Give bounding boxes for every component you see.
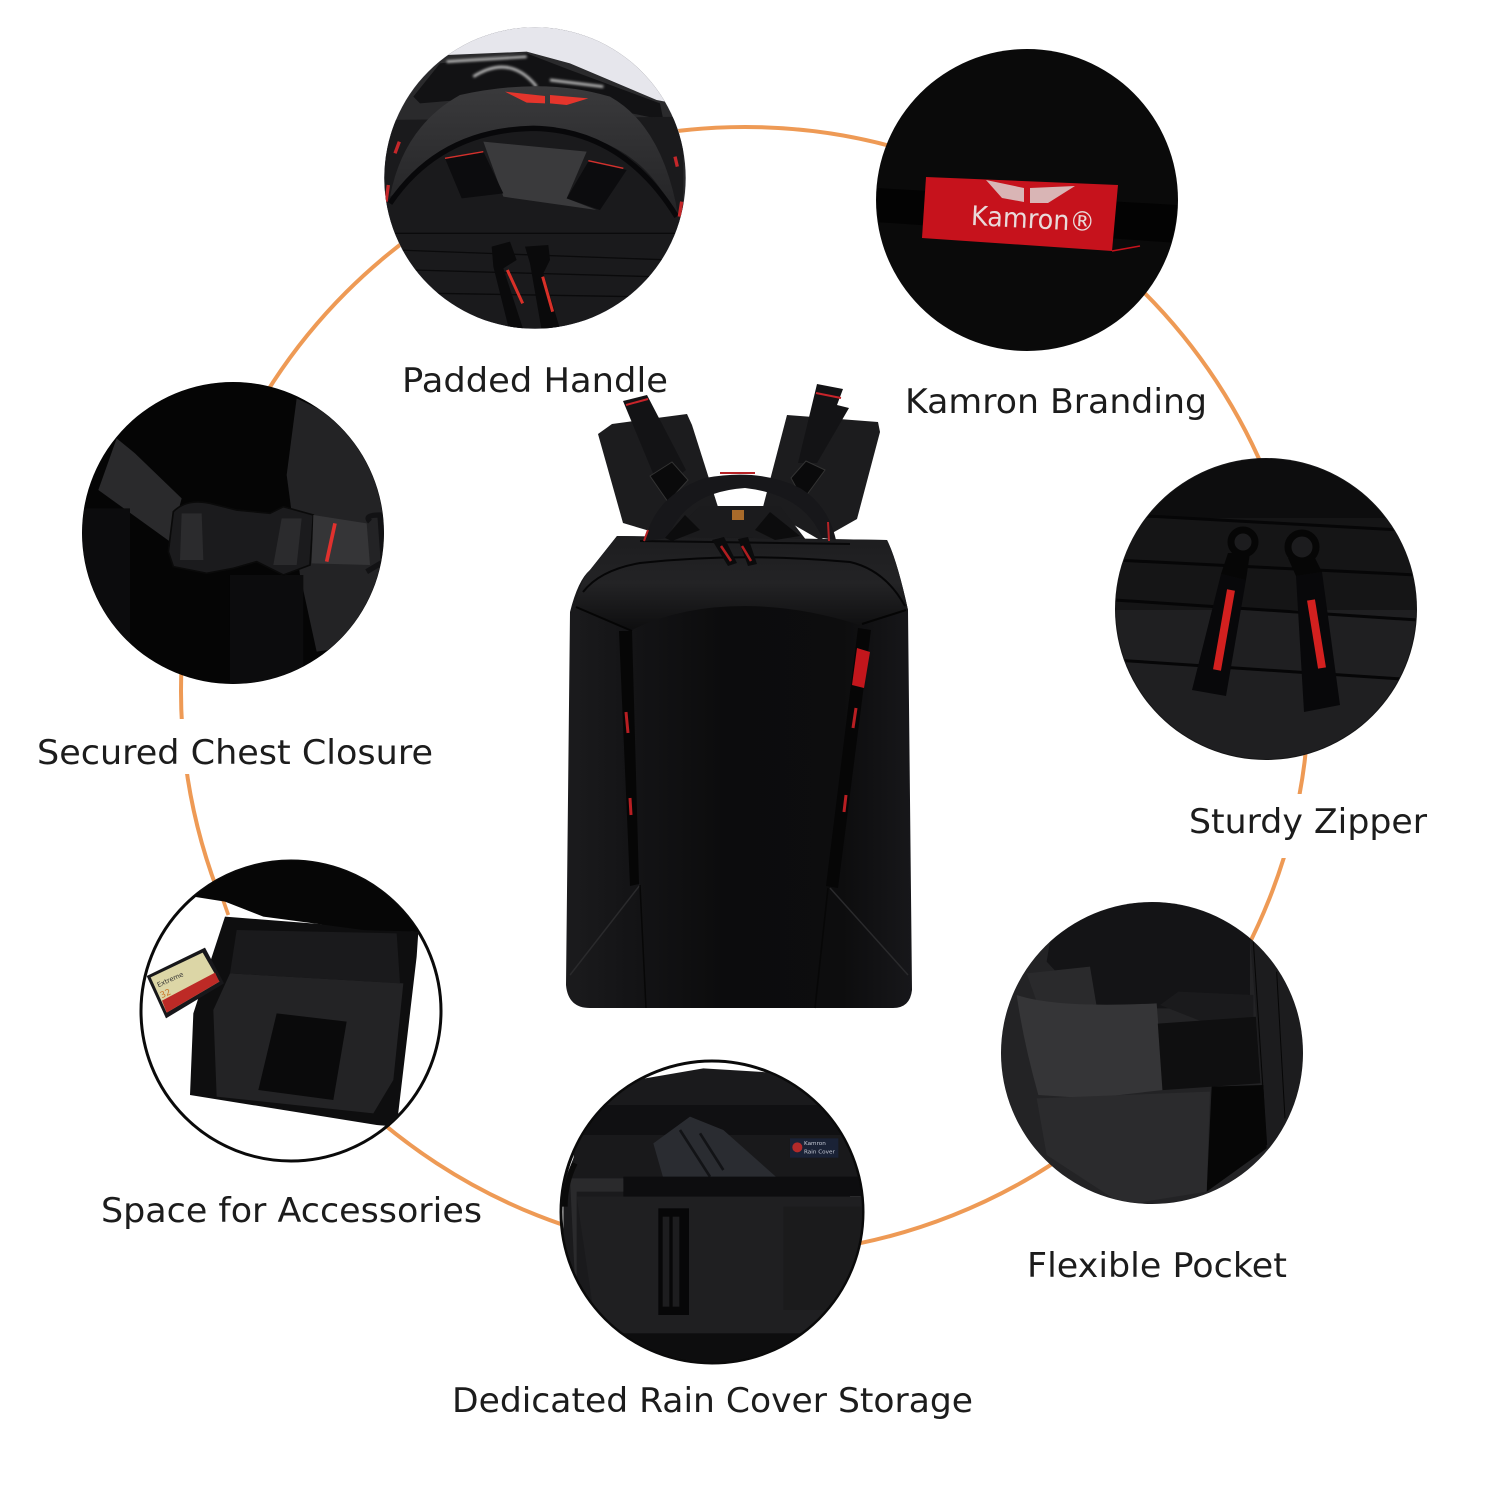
label: Kamron branding: Kamron Branding [905, 382, 1207, 422]
label: sturdy zipper: Sturdy Zipper [1189, 802, 1427, 842]
back panel top [660, 506, 810, 545]
left shoulder pad [598, 414, 718, 540]
circle: sturdy zipper [1115, 458, 1417, 760]
right strap [791, 384, 849, 500]
label: padded handle: Padded Handle [402, 361, 668, 401]
zipper pulls [712, 537, 757, 566]
label: flexible pocket: Flexible Pocket [1027, 1246, 1287, 1286]
red tag [852, 648, 870, 688]
right shoulder pad [763, 415, 880, 540]
label: dedicated rain cover storage: Dedicated Rain Cover Storage [452, 1381, 973, 1421]
top band [575, 536, 908, 630]
ring fragment [217, 882, 228, 915]
webbing left [619, 631, 639, 886]
circle: chest closure [82, 382, 384, 684]
red ticks [626, 708, 856, 815]
label: secured chest closure: Secured Chest Closure [37, 733, 433, 773]
circle: Kamron branding [876, 49, 1178, 351]
label: space for accessories: Space for Accessories [101, 1191, 482, 1231]
circle: rain cover storage: Rain Cover [804, 1149, 835, 1155]
left strap [623, 395, 688, 502]
memory card: Extreme [156, 970, 185, 989]
circle: space for accessories [141, 857, 441, 1161]
memory card: 32 [159, 987, 173, 1001]
circle: padded handle [384, 27, 686, 329]
corner seams [570, 885, 908, 975]
circle: Kamron branding: Kamron® [970, 201, 1096, 238]
memory card [147, 948, 224, 1018]
circle: rain cover storage [550, 1061, 880, 1370]
central backpack [566, 384, 912, 1008]
handle [645, 475, 836, 541]
webbing right [826, 628, 871, 888]
circle: flexible pocket [1001, 902, 1303, 1204]
circle: rain cover storage: Kamron [804, 1141, 826, 1147]
orange connector ring [165, 127, 1315, 1255]
body [566, 536, 912, 1008]
